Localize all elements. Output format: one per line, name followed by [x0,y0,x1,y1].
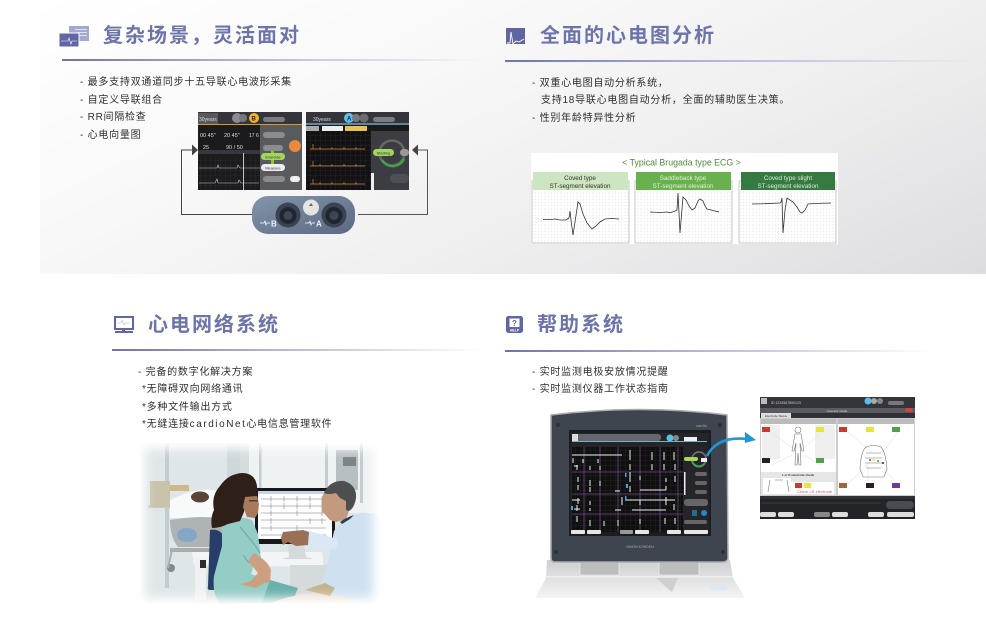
screen: channel B: 00 45" [200,133,216,139]
label: Coved type: Coved type [564,175,596,182]
text block: help list: - 实时监测仪器工作状态指南 [532,384,669,395]
screen: channel B: Measure [265,165,282,170]
chair [208,530,222,590]
screen: channel B: 90 / 50 [226,145,243,151]
title: Typical Brugada: < Typical Brugada type ECG > [622,158,741,168]
text block: help list: - 实时监测电极安放情况提醒 [532,367,669,378]
device: ECG machine: cardio [696,423,708,428]
icon: ECG chart [506,28,525,44]
connector panel: B [271,220,277,228]
screen: channel A: 30years [313,117,331,123]
icon: help [506,316,523,333]
body [551,410,728,562]
label: Saddleback type [636,172,731,190]
label: Coved type slight [741,172,835,190]
text block: network list [138,366,332,430]
photo: doctor and nurse at ECG monitor [140,443,382,604]
label: Coved type slight: Coved type slight [764,175,812,182]
icon: help: ? [512,319,517,328]
icon: help: HELP [510,328,520,332]
text block: complex scenarios list: - 心电向量图 [80,130,141,141]
screen: channel B: Exercise [265,154,281,159]
screen: electrode status help: Check LR electrode [797,489,833,494]
screen: channel B: 17 6 [249,133,259,139]
text block: network list: *多种文件输出方式 [142,402,233,413]
screen: channel B [198,112,302,190]
text block: ECG analysis list: 支持18导联心电图自动分析，全面的辅助医生决策。 [541,95,790,106]
base [535,560,745,598]
screen: electrode status help: L or R electrode check [782,473,814,477]
desk [192,552,324,567]
waveform: coved [543,202,619,235]
connector panel: A [316,220,322,228]
panel: Brugada ECG [531,153,838,244]
icon: monitor [115,317,133,333]
screen [569,430,711,536]
text block: complex scenarios list: - RR间隔检查 [80,112,147,123]
label: Coved type slight: ST-segment elevation [758,183,819,190]
screen: channel B: 25 [203,145,209,151]
screen: channel A: Starting [377,150,390,155]
text block: ECG analysis list: - 双重心电图自动分析系统， [532,78,669,89]
diagram: connection lines and arrows [182,144,428,214]
text block: ECG analysis list: - 性别年龄特异性分析 [532,113,636,124]
text block: network list: *无缝连接cardioNet心电信息管理软件 [142,419,332,430]
screen: channel B: 20 45" [224,133,240,139]
waveform: coved slight [752,198,831,233]
waveform: saddleback [650,193,719,233]
screen: electrode status help: ID 1234567890123 [771,401,801,405]
arrow: blue curved [707,432,756,456]
monitor [255,488,335,544]
panel background: top band [40,0,986,274]
text block: ECG analysis list [532,77,790,124]
device: ECG machine [535,410,745,598]
label: Saddleback type: Saddleback type [660,175,707,182]
heading: full ECG analysis: 全面的心电图分析 [540,25,716,47]
text block: network list: - 完备的数字化解决方案 [138,367,253,378]
screen: electrode status help: Electrode Status [765,414,788,418]
icon: two screens [59,26,89,47]
doctor [320,513,373,598]
device: ECG machine: NIHON KOHDEN [626,545,654,549]
nurse [214,518,270,604]
text block: help list [532,366,669,395]
text block: complex scenarios list [80,76,292,141]
text block: complex scenarios list: - 最多支持双通道同步十五导联心电波形采集 [80,77,292,88]
connector panel [252,196,355,234]
screen: channel B: B [252,116,256,122]
heading: complex scenarios: 复杂场景，灵活面对 [103,25,301,47]
screen: electrode status help [760,397,915,519]
screen: channel A: A [347,116,352,122]
screen: channel B: 30years [199,117,217,123]
screen: channel A [306,112,409,190]
text block: network list: *无障碍双向网络通讯 [142,384,243,395]
text block: complex scenarios list: - 自定义导联组合 [80,95,163,106]
label: Saddleback type: ST-segment elevation [653,183,714,190]
label: Coved type [533,172,628,190]
heading: ECG network system: 心电网络系统 [148,314,280,336]
label: Coved type: ST-segment elevation [550,183,611,190]
heading: help system: 帮助系统 [537,314,625,336]
screen: electrode status help: Operator Guide [827,409,848,413]
